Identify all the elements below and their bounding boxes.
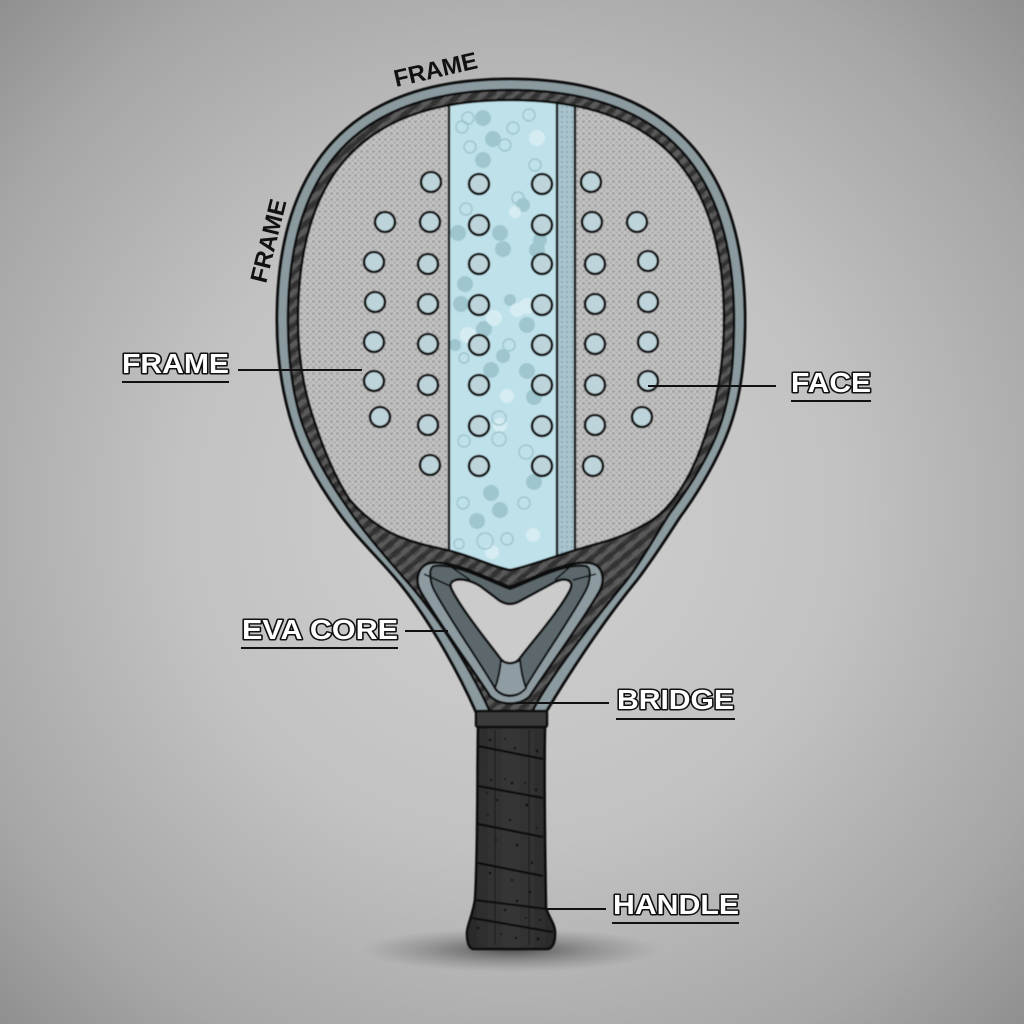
throat facet lines (424, 564, 596, 587)
handle (467, 711, 555, 949)
label: face callout (648, 367, 871, 401)
holes (364, 172, 658, 476)
grip speckles (477, 738, 541, 940)
label: handle callout: HANDLE (613, 889, 739, 920)
padel racket (277, 79, 745, 949)
grip (467, 727, 555, 949)
throat opening (450, 579, 571, 663)
label: frame callout: FRAME (122, 348, 229, 379)
throat outer rim (418, 563, 603, 704)
label: handle callout (547, 889, 739, 923)
ground shadow (361, 928, 661, 972)
label: EVA core callout (241, 614, 448, 648)
face (298, 95, 724, 575)
carbon frame band (288, 90, 734, 712)
label: EVA core callout: EVA CORE (242, 614, 398, 645)
label: bridge callout (516, 684, 735, 719)
face texture (298, 100, 724, 570)
collar (476, 711, 547, 727)
bridge lower piece (495, 660, 526, 696)
label: frame top: FRAME (391, 47, 480, 93)
grip vertical seams (495, 730, 529, 945)
throat inner band (430, 566, 590, 696)
label: bridge callout: BRIDGE (617, 684, 734, 715)
secondary strip (557, 95, 575, 575)
label: frame side: FRAME (246, 196, 292, 285)
frame outer band (277, 79, 745, 712)
grip wrap lines (472, 746, 553, 932)
throat bridge (418, 563, 603, 704)
label: frame callout (122, 348, 362, 382)
blue core strip (449, 95, 575, 575)
label: face callout: FACE (791, 367, 871, 398)
face outline (298, 100, 724, 570)
